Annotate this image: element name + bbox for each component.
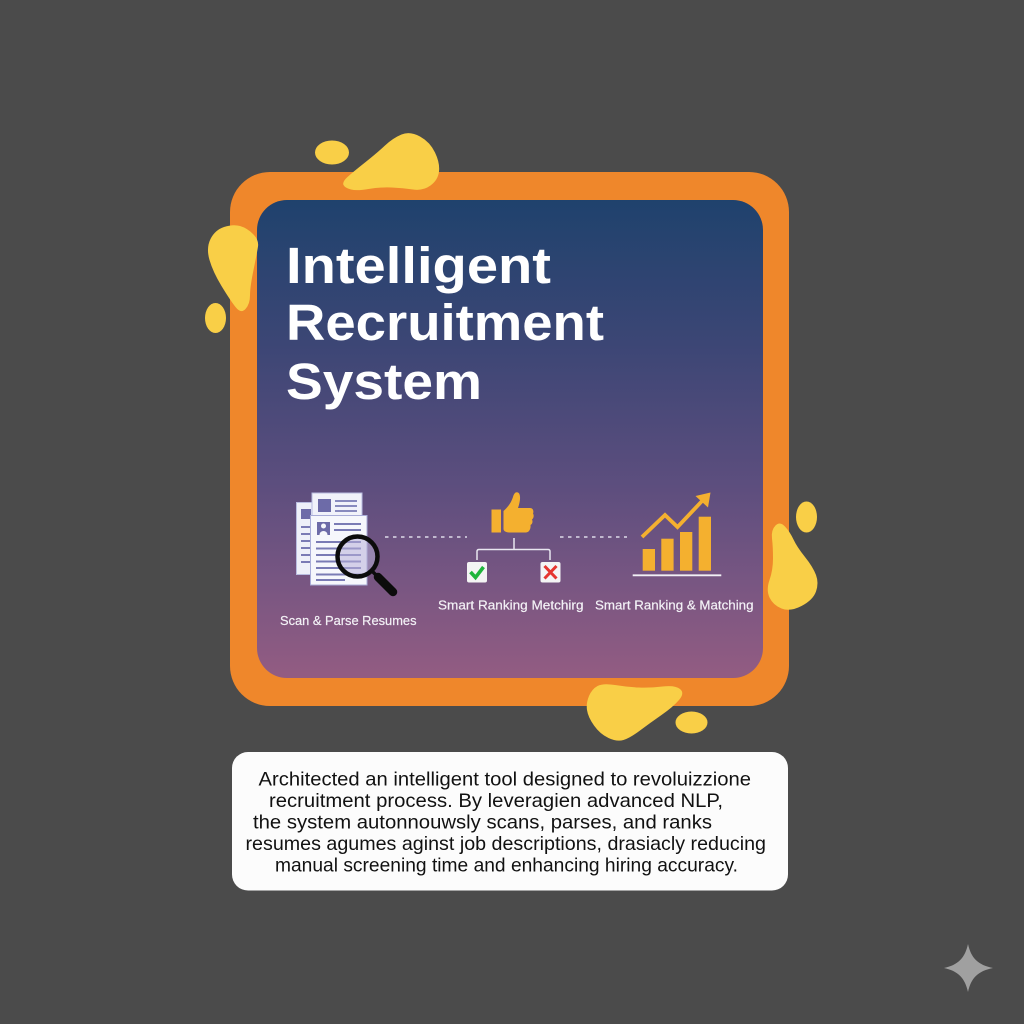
resume: front [310,516,367,585]
icon: thumbs up with decision tree [467,492,560,582]
description text: resumes agumes aginst job descriptions, drasiacly reducing [246,833,766,855]
icon: resumes and magnifier [296,493,393,592]
baseline [633,574,721,576]
blob: left large [208,225,258,311]
title line 2: Recruitment [286,294,604,351]
description text: Architected an intelligent tool designed to revoluizzione [258,769,751,791]
blob: top large [343,133,439,190]
resume: back left [296,502,336,574]
description background [232,752,788,890]
check box [467,562,487,582]
blob: bottom small [676,712,708,734]
description text: the system autonnouwsly scans, parses, and ranks [253,812,712,834]
icon: sparkle watermark [944,944,993,992]
magnifier [338,536,393,592]
description text [246,769,766,877]
label: smart ranking and matching: Smart Ranking & Matching [595,598,754,612]
trend arrow [642,492,710,537]
panel: orange frame [230,172,789,706]
title line 3: System [286,353,482,410]
icon: growth bar chart [633,492,721,575]
connector: dashed right [560,536,627,538]
blob: right large [768,523,818,610]
blob: right small [796,502,817,532]
label: scan and parse: Scan & Parse Resumes [280,614,416,628]
step labels [280,598,754,628]
connector: dashed left [385,536,467,538]
thumbs up [492,492,534,532]
blob: left small [205,303,226,333]
cross box [540,562,560,582]
blob: top small [315,140,349,164]
yellow blobs [205,133,818,741]
title [286,237,604,410]
panel: description box [232,752,788,890]
description text: manual screening time and enhancing hiring accuracy. [275,855,738,877]
decision branches [477,538,550,560]
panel: gradient card [257,200,763,678]
title line 1: Intelligent [286,237,551,294]
bars [643,517,711,571]
label: smart ranking metching: Smart Ranking Metchirg [438,598,584,612]
description text: recruitment process. By leveragien advanced NLP, [269,790,723,812]
resume: back top [312,493,362,533]
blob: bottom large [587,684,682,741]
